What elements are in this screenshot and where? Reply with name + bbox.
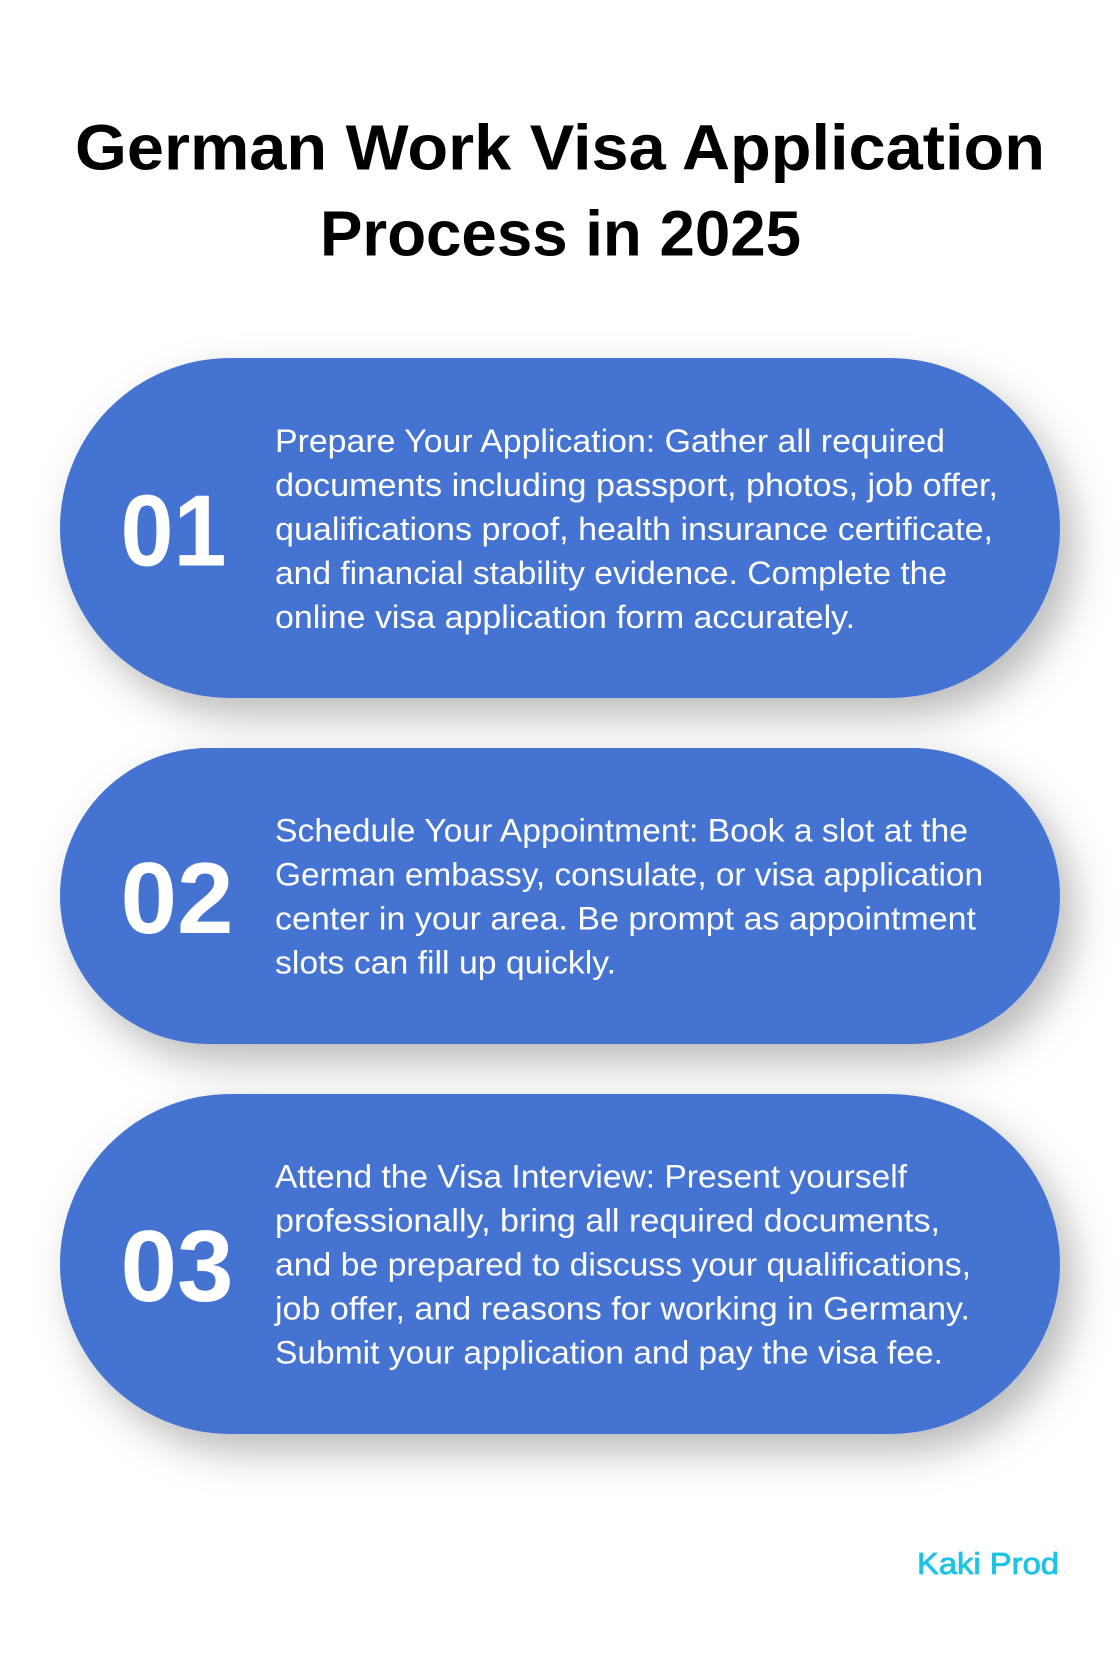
panel: step 01 [60, 358, 1060, 698]
step 03 text [274, 1158, 971, 1370]
step 01 text [275, 423, 998, 635]
panel: step 02 [60, 748, 1060, 1044]
step 03 text: job offer, and reasons for working in Germany. [274, 1290, 970, 1326]
step 01 text: qualifications proof, health insurance certificate, [275, 511, 993, 547]
step number 03: 03 [120, 1211, 234, 1323]
step 03 text: Attend the Visa Interview: Present yourself [275, 1158, 907, 1194]
step 02 text: Schedule Your Appointment: Book a slot at the [275, 812, 968, 848]
title: Process in 2025 [320, 198, 801, 270]
title: German Work Visa Application [75, 112, 1045, 184]
step 02 text: German embassy, consulate, or visa application [275, 856, 983, 892]
step number 02: 02 [120, 843, 234, 955]
step 03 text: and be prepared to discuss your qualifications, [275, 1246, 971, 1282]
step 01 text: Prepare Your Application: Gather all required [275, 423, 945, 459]
step 01 text: online visa application form accurately. [275, 599, 855, 635]
title [75, 112, 1045, 270]
step 02 text [275, 812, 983, 980]
step number 01: 01 [120, 476, 226, 588]
logo: Kaki Prod: Kaki Prod [917, 1546, 1059, 1581]
step 01 text: documents including passport, photos, job offer, [275, 467, 998, 503]
step 03 text: professionally, bring all required documents, [275, 1202, 940, 1238]
panel: step 03 [60, 1094, 1060, 1434]
step 02 text: slots can fill up quickly. [275, 944, 616, 980]
step 03 text: Submit your application and pay the visa fee. [275, 1334, 943, 1370]
step 01 text: and financial stability evidence. Complete the [275, 555, 947, 591]
step 02 text: center in your area. Be prompt as appointment [275, 900, 976, 936]
